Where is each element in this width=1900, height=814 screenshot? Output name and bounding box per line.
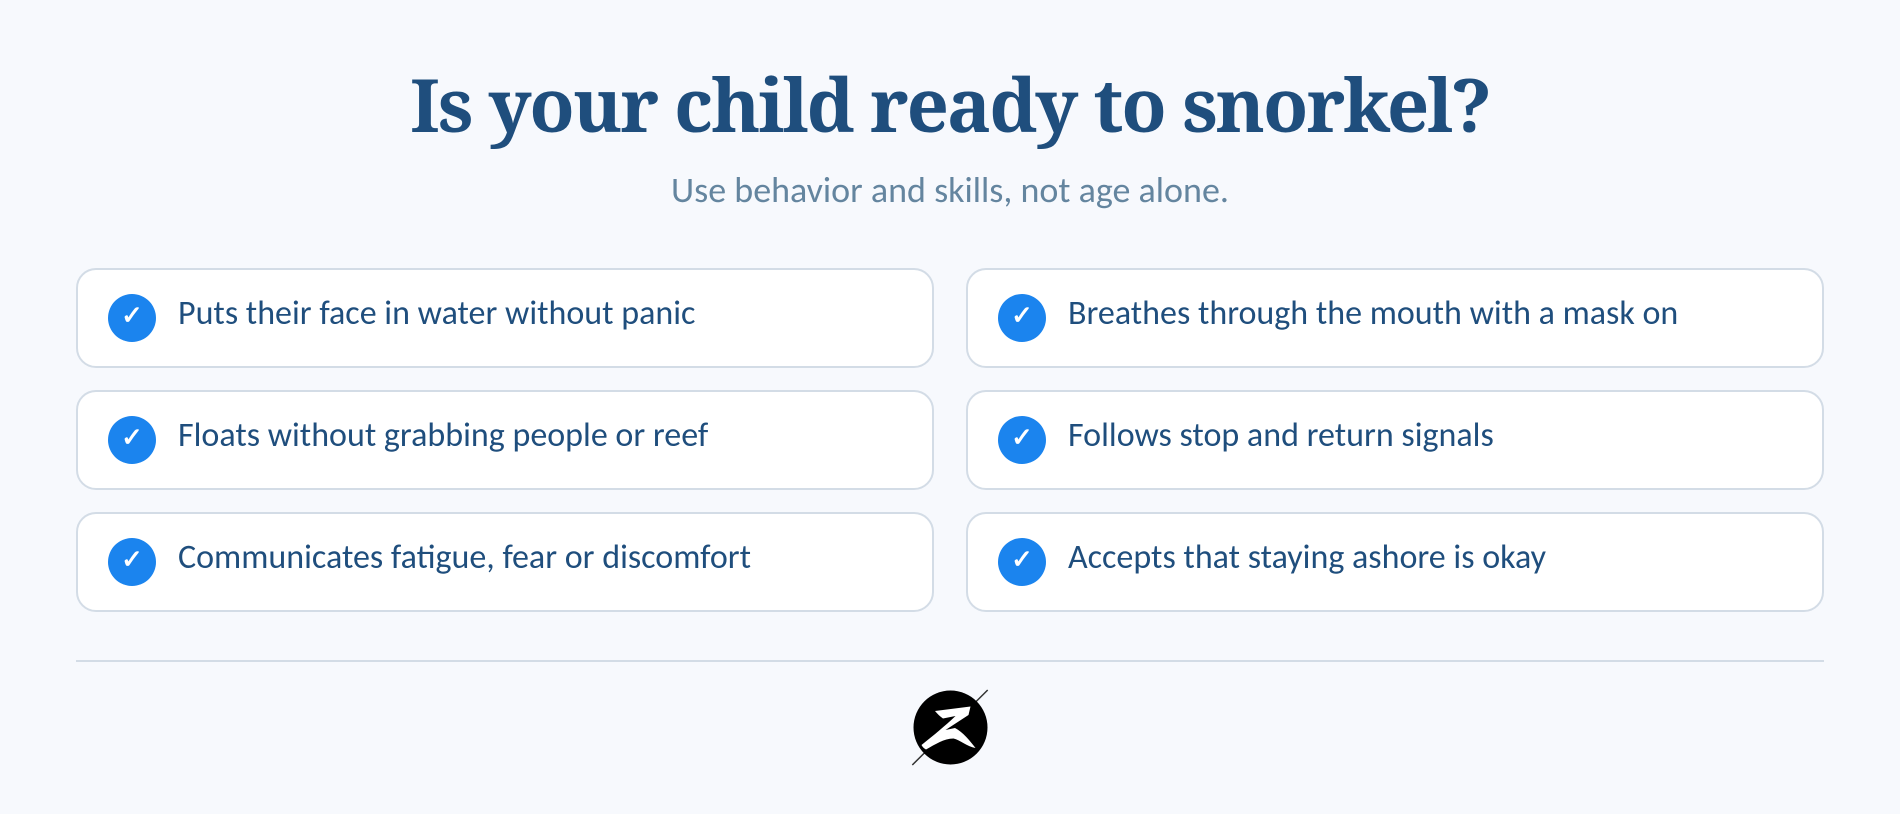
icon: check [108,416,156,464]
card: face in water [76,268,934,368]
logo [912,690,988,766]
icon: check: ✓ [1011,301,1033,331]
icon: check: ✓ [1011,545,1033,575]
icon: check [998,538,1046,586]
icon: check: ✓ [121,423,143,453]
icon: check [998,416,1046,464]
card text: Puts their face in water without panic [178,293,695,334]
icon: check [108,538,156,586]
card: communicates [76,512,934,612]
icon: check: ✓ [1011,423,1033,453]
card: floats [76,390,934,490]
card text: Accepts that staying ashore is okay [1068,537,1546,578]
card: ashore [966,512,1824,612]
icon: check [108,294,156,342]
card text: Floats without grabbing people or reef [178,415,708,456]
card text: Follows stop and return signals [1068,415,1494,456]
card text: Breathes through the mouth with a mask on [1068,293,1678,334]
card: signals [966,390,1824,490]
icon: check: ✓ [121,301,143,331]
title: Is your child ready to snorkel? [410,53,1490,154]
icon: check: ✓ [121,545,143,575]
icon: check [998,294,1046,342]
subtitle: Use behavior and skills, not age alone. [671,168,1229,212]
card: mouth breathing [966,268,1824,368]
card text: Communicates fatigue, fear or discomfort [178,537,751,578]
